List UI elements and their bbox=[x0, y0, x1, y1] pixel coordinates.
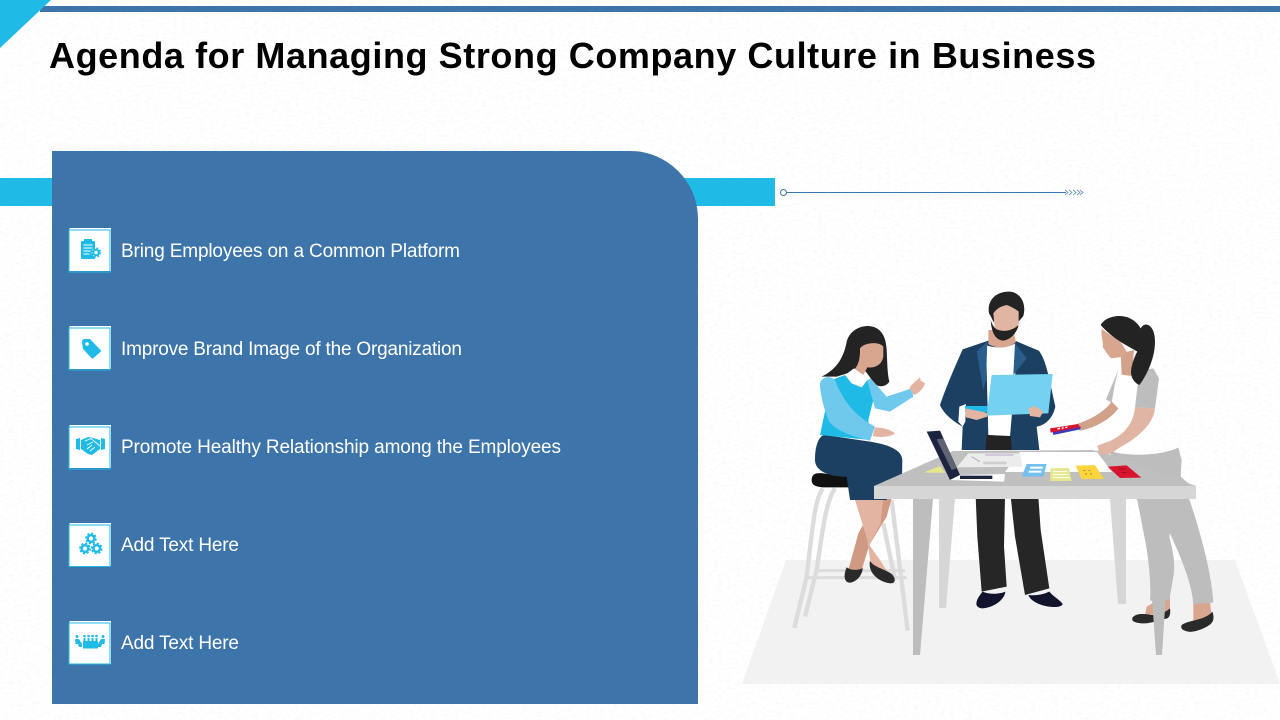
standing man upper body bbox=[940, 292, 1055, 450]
table bbox=[874, 450, 1196, 655]
arrow line bbox=[780, 190, 1083, 196]
agenda item 2 bbox=[69, 326, 462, 370]
agenda panel bbox=[52, 151, 698, 704]
icon: price tag bbox=[69, 326, 111, 370]
agenda item 3 bbox=[69, 425, 561, 469]
agenda item 1 bbox=[69, 228, 460, 272]
item text: Add Text Here bbox=[121, 633, 239, 654]
corner triangle bbox=[0, 0, 51, 48]
top accent bar bbox=[40, 6, 1280, 12]
standing woman upper body bbox=[1050, 316, 1160, 455]
icon: handshake bbox=[69, 425, 111, 469]
icon: gears bbox=[69, 523, 111, 566]
standing woman hips bbox=[1107, 448, 1188, 500]
icon: meeting table bbox=[69, 621, 111, 664]
standing man legs bbox=[976, 497, 1063, 608]
seated woman legs bbox=[845, 497, 895, 583]
illustration: team meeting bbox=[742, 292, 1280, 684]
laptop and papers bbox=[923, 431, 1022, 482]
seated woman upper body bbox=[812, 326, 925, 500]
item text: Bring Employees on a Common Platform bbox=[121, 241, 460, 262]
sticky notes bbox=[1022, 464, 1141, 481]
agenda item 5 bbox=[69, 621, 239, 664]
item text: Add Text Here bbox=[121, 535, 239, 556]
bar stool bbox=[794, 488, 908, 631]
title: Agenda for Managing Strong Company Culture in Business bbox=[49, 35, 1096, 76]
item text: Promote Healthy Relationship among the Employees bbox=[121, 437, 561, 458]
floor rug bbox=[742, 560, 1280, 684]
standing woman legs bbox=[1132, 497, 1214, 632]
icon: clipboard with gear bbox=[69, 228, 111, 272]
agenda item 4 bbox=[69, 523, 239, 566]
item text: Improve Brand Image of the Organization bbox=[121, 339, 462, 360]
cyan band bbox=[0, 178, 775, 206]
